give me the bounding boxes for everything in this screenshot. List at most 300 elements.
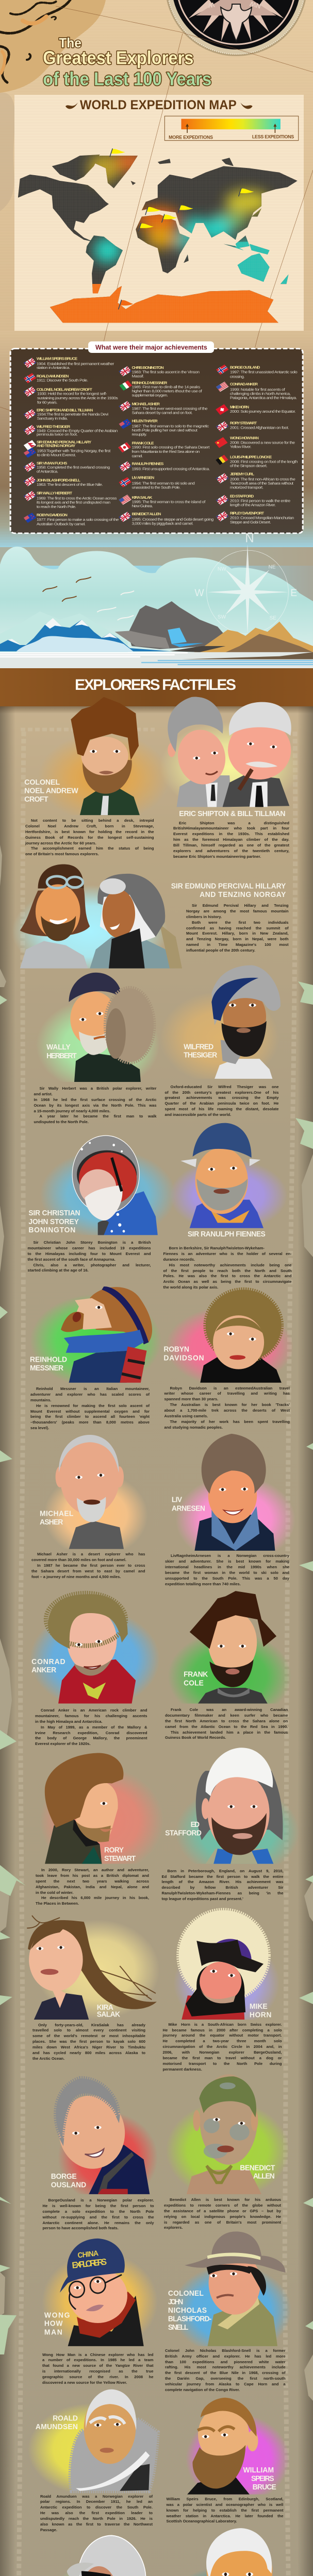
text: Allen: explorers.	[164, 2225, 183, 2230]
entry: Blashford-Snell: JOHN BLASHFORD-SNELL	[37, 478, 80, 482]
text: Fiennes: Fiennes is an adventurer who is the holder of several en-	[163, 1251, 292, 1256]
map: flags marking expeditions	[110, 148, 254, 309]
text: Amundsen: Passage.	[40, 2528, 57, 2532]
entry: Cole: FRANK COLE	[131, 441, 154, 445]
entry: Loncke: LOUIS-PHILIPPE LONCKE	[230, 455, 272, 459]
text: Fiennes: Born in Berkshire, Sir RanulphTwisleton-Wykeham-	[169, 1246, 265, 1250]
text: Horn: Mike Horn is a South-African born Swiss explorer.	[168, 2022, 282, 2027]
name: BRUCE	[253, 2483, 276, 2492]
scene: white compass: S	[243, 635, 252, 649]
name	[240, 2164, 275, 2181]
name: ANKER	[31, 1666, 57, 1674]
name	[184, 1043, 218, 1060]
entry: Arnesen	[119, 476, 195, 489]
text: Stewart	[36, 1868, 149, 1906]
text: Bruce: known for helping to establish the first permanent	[166, 2508, 284, 2513]
name	[36, 2414, 78, 2431]
text: Arnesen: unsupported to the South Pole. This was a 50 day	[165, 1576, 289, 1581]
name	[31, 1658, 65, 1674]
name	[184, 1670, 208, 1688]
text: Messner: adventurer and explorer who has scaled scores of	[30, 1392, 150, 1397]
portrait: Hillary and Norgay	[12, 865, 286, 969]
text: Arnesen: international headlines in the mid 1990s when she	[165, 1565, 289, 1569]
entry: Loncke	[216, 455, 298, 468]
entry: Amundsen	[24, 373, 88, 383]
name: ASHER	[40, 1518, 63, 1527]
entry: Fuchs: SIR VIVIAN FUCHS	[37, 461, 67, 465]
world map	[12, 147, 303, 326]
portrait: Wilfred Thesiger	[160, 965, 281, 1079]
text: Allen: the assistance of a satellite phone or GPS – but by	[164, 2209, 281, 2213]
text: Anker: Everest explorer of the 1920s.	[35, 1741, 91, 1746]
text: Fiennes: His most noteworthy achievements include being one	[169, 1263, 292, 1267]
text: Asher: In 1987 he became the first person ever to cross	[37, 1563, 145, 1568]
text: Arnesen: became the first woman in the world to ski solo and	[165, 1570, 289, 1575]
text: Bruce: weather station in Antarctica. He later founded the	[166, 2514, 284, 2518]
entry: Loncke: of the Simpson desert.	[230, 464, 268, 468]
text: Herbert: Sir Wally Herbert was a British polar explorer, writer	[39, 1086, 157, 1091]
entry: Salak: KIRA SALAK	[131, 496, 153, 500]
portrait: Kira Salak	[27, 1916, 160, 2020]
entry: Hillary and Norgay	[24, 440, 111, 458]
name	[172, 1496, 205, 1513]
legend: expedition density: LESS EXPEDITIONS	[252, 134, 294, 140]
text: Croft	[25, 818, 154, 856]
text: Blashford-Snell: British Army officer and explorer. He has led more	[165, 2354, 286, 2359]
text: Bonington: mountaineer whose career has included 19 expeditions	[28, 1246, 151, 1250]
text: Croft: Colonel Noel Andrew Croft, born in Stevenage,	[25, 824, 154, 828]
name: DAVIDSON	[163, 1354, 204, 1363]
portrait: Rory Stewart	[40, 1753, 163, 1864]
name: COLONEL	[168, 2290, 204, 2298]
text: Wong: geographic source of the river. In 2008 he	[42, 2375, 154, 2379]
entry: Davidson: ROBYN DAVIDSON	[37, 513, 68, 517]
name: CROFT	[24, 795, 48, 804]
entry: Allen	[119, 512, 213, 526]
entry: Messner: supplemental oxygen.	[131, 393, 168, 397]
text: Blashford-Snell: the Darién Gap, overseeing the first north-south	[165, 2376, 286, 2381]
entry: Fiennes: RANULPH FIENNES	[131, 462, 163, 466]
portrait: Wong How Man: CHINA	[77, 2249, 99, 2260]
text: Herbert: and artist.	[34, 1092, 53, 1096]
text: Cole: the first North American to cross the Sahara alone on	[165, 1719, 288, 1723]
portrait: Liv Arnesen	[172, 1434, 295, 1551]
text: Amundsen: Roald Amundsen was a Norwegian explorer of	[40, 2494, 153, 2499]
text: Salak: the Arctic Ocean.	[32, 2056, 64, 2061]
entry: Herbert	[24, 491, 117, 509]
entry: Fiennes	[119, 461, 210, 471]
text: Shipton and Tillman: Bill Tillman, himself regarded as one of the greatest	[173, 843, 289, 848]
portrait: Ed Stafford	[165, 1748, 300, 1864]
text: Bruce: was a polar scientist and oceanographer who is well	[166, 2502, 284, 2507]
entry: Bonington: CHRIS BONINGTON	[131, 366, 164, 370]
entry: Salak: 1995: The first woman to cross the island of	[131, 500, 206, 504]
entry: Asher: Sahara desert by camel and on foot.	[131, 411, 193, 415]
name: COLONEL	[24, 778, 60, 787]
text: Bonington: started climbing at the age of 16.	[28, 1268, 89, 1273]
text: Wong	[42, 2352, 154, 2385]
entry: Horn: MIKE HORN	[230, 405, 249, 409]
entry: Herbert: 1969: The first to cross the Arctic Ocean across	[37, 496, 117, 500]
name	[165, 1821, 202, 1838]
entry: Hillary and Norgay: SIR EDMUND PERCIVAL HILLARY	[37, 440, 91, 444]
text: Horn: He completed a two-year three month solo	[163, 2039, 282, 2043]
text: Salak: some of the world's remotest or most inhospitable	[32, 2033, 145, 2038]
entry: Asher: 1987: The first ever west-east crossing of the	[131, 406, 208, 411]
portrait: Roald Amundsen	[28, 2389, 158, 2491]
text: Messner: He is renowned for making the first solo ascent of	[36, 1403, 150, 1408]
name: WILFRED	[184, 1043, 213, 1051]
text: Horn: journey around the equator without motor transport.	[163, 2033, 282, 2038]
text: Salak: Only forty-years-old, KiraSalak has already	[38, 2023, 145, 2027]
title: of the Last 100 Years	[43, 69, 211, 90]
text: Horn: 2006, with Norwegian explorer BørgeOusland,	[163, 2050, 282, 2055]
name: FRANK	[184, 1670, 208, 1679]
text: Stafford: RanulphTwisleton-Wykeham-Fiennes as being 'in the	[162, 1891, 284, 1895]
text: Cole: Frank Cole was an award-winning Canadian	[171, 1707, 288, 1712]
entry: Amundsen: 1911: Discover the South Pole.	[37, 378, 88, 382]
entry: Thesiger	[24, 425, 118, 436]
text: Blashford-Snell: complete navigation of the Congo River.	[165, 2387, 240, 2392]
text: Cole: documentary filmmaker and keen surfer who became	[165, 1713, 288, 1718]
text: Hillary and Norgay: climbers in history.	[186, 914, 222, 919]
portrait: Wong How Man: EXPLORERS	[72, 2257, 107, 2270]
portrait: Borge Ousland	[51, 2078, 158, 2194]
name	[97, 2004, 121, 2019]
entry: Bruce: station in Antarctica.	[37, 366, 70, 370]
heading: AND TENZING NORGAY	[200, 891, 286, 899]
entry: Fuchs: 1958: Completed the first overland crossing	[37, 465, 110, 469]
text: Hillary and Norgay: Sir Edmund Percival Hillary and Tenzing	[192, 903, 289, 908]
text: Asher	[31, 1552, 145, 1579]
portraits group one	[24, 697, 300, 818]
text: Blashford-Snell: Colonel John Nicholas Blashford-Snell is a former	[165, 2348, 286, 2353]
text: Anker: the body of George Mallory, the preeminent	[35, 1736, 147, 1740]
text: Hillary and Norgay: and Tenzing Norgay, born in Nepal, were both	[186, 937, 289, 941]
text: Fiennes: Arctic Ocean as well as being the first to circumnavigate	[163, 1279, 292, 1284]
text: Stewart: spent the next two years walking across	[36, 1879, 149, 1884]
entry: Thayer: HELEN THAYER	[131, 419, 158, 423]
text: Hillary and Norgay: named in Time Magazine's 100 most	[186, 942, 289, 947]
name: COLE	[184, 1679, 204, 1688]
name: WALLY	[46, 1043, 71, 1052]
illustration: sky, mountains and compass scene	[0, 531, 313, 668]
entry: Wong: WONG HOW MAN	[230, 436, 259, 440]
scene: white compass	[194, 531, 297, 649]
text: Wong: that found a new source of the Yangtze River that	[42, 2363, 154, 2368]
name: MESSNER	[30, 1364, 64, 1372]
text: Stafford: length of the Amazon River. His achievement was	[162, 1879, 284, 1884]
illustration: compass	[165, 0, 307, 56]
text: Bonington: Sir Christian John Storey Bonington is a British	[33, 1240, 151, 1245]
entry: Wong: Yellow River.	[230, 445, 252, 449]
entry: Bonington: 1983: The first solo ascent in the Vinson	[131, 370, 200, 374]
name: MIKE	[250, 2003, 268, 2011]
entry: Bruce: 1904: Established the first permanent weather	[37, 362, 114, 366]
heading band: explorers factfiles: EXPLORERS FACTFILES	[75, 676, 236, 693]
text: Davidson: Robyn Davidson is an esteemedAustralian travel	[170, 1386, 290, 1391]
name: ROBYN	[163, 1345, 189, 1354]
text: Thesiger	[165, 1084, 278, 1117]
portrait: Michael Asher	[40, 1435, 147, 1549]
text: Blashford-Snell: than 100 expeditions and pioneered white water	[165, 2360, 286, 2364]
text: Thesiger: and inaccessible parts of the world.	[165, 1112, 231, 1117]
entry: Shipton and Tillman: 1934:The first to penetrate the Nanda Devi	[37, 412, 108, 416]
text: Davidson	[164, 1386, 290, 1430]
name: SALAK	[97, 2010, 121, 2019]
name	[243, 2466, 276, 2492]
scene: white compass: E	[290, 587, 297, 599]
text: Horn	[162, 2022, 282, 2072]
text: Allen: Benedict Allen is best known for his arduous	[170, 2197, 281, 2202]
text: Cole	[165, 1707, 288, 1740]
text: Asher: Michael Asher is a desert explorer who has	[37, 1552, 145, 1556]
entry: Stafford: ED STAFFORD	[230, 494, 254, 498]
scene: white compass: W	[194, 587, 204, 599]
name: ROALD	[53, 2414, 78, 2423]
text: Davidson: about a 1,700-mile trek across the deserts of West	[164, 1408, 290, 1413]
name: WONG	[44, 2311, 70, 2319]
text: Hillary and Norgay: Mount Everest. Hillary, born in New Zealand,	[186, 931, 289, 936]
entry: Amundsen: ROALD AMUNDSEN	[37, 374, 69, 379]
scene: blue snowy mountains	[0, 618, 172, 652]
text: Anker	[35, 1708, 147, 1746]
entry: Anker	[216, 382, 297, 400]
name: SNELL	[168, 2324, 189, 2332]
text: Allen: expeditions to remote corners of the globe without	[164, 2203, 281, 2208]
name	[30, 1355, 67, 1372]
entry: Bonington	[119, 366, 200, 379]
heading tab	[88, 342, 214, 353]
text: Bonington: the first ascent of the south face of Annapurna.	[28, 1257, 116, 1262]
name	[40, 1510, 74, 1527]
text: Wong: discovered a new source for the Yellow River.	[42, 2380, 127, 2385]
entry: Blashford-Snell: 1963: The first descent of the Blue Nile.	[37, 483, 103, 487]
entry: Cole: from Mauritania to the Red Sea alone on	[131, 450, 200, 454]
entry: Wong: 2008: Discovered a new source for the	[230, 440, 295, 445]
illustration: compass: W	[207, 1, 215, 10]
text: Messner: Mount Everest without supplemental oxygen and for	[30, 1409, 150, 1414]
illustration: compass: NW	[249, 0, 262, 10]
text: Stafford: top league of expeditions past and present.'	[162, 1896, 243, 1901]
entry: Ousland	[216, 364, 298, 379]
text: Bonington	[28, 1240, 151, 1273]
text: Stewart: In 2000, Rory Stewart, an author and adventurer,	[41, 1868, 149, 1872]
portrait: Blashford-Snell	[168, 2231, 291, 2346]
text: Davidson: Australia using camels.	[164, 1414, 208, 1418]
portrait: Mike Horn	[174, 1910, 279, 2020]
text: Thesiger: Oxford-educated Sir Wilfred Thesiger was one	[170, 1084, 278, 1089]
text: Stewart: took leave from his post as a British diplomat and	[36, 1873, 149, 1878]
entry: Hillary and Norgay: to climb Mount Everest.	[37, 453, 76, 457]
text: Davidson: spanned more than 30 years.	[164, 1397, 218, 1401]
name	[46, 1043, 77, 1060]
text: Herbert	[34, 1086, 157, 1124]
text: Salak: miles down West Africa's Niger River to Timbuktu	[32, 2045, 145, 2049]
text: Amundsen: also known as the first to traverse the Northwest	[40, 2522, 153, 2527]
name	[51, 2173, 86, 2189]
heading: SIR EDMUND PERCIVAL HILLARY	[171, 882, 286, 891]
text: Ousland: complete a solo expedition to the North Pole	[42, 2209, 154, 2214]
name: RORY	[104, 1846, 124, 1855]
entry: Salak: New Guinea.	[131, 504, 153, 508]
entry: Croft: 1930: Held the record for the longest self-	[37, 392, 107, 396]
illustration: old map coastline top-left	[0, 0, 70, 82]
entry: Asher	[119, 401, 208, 415]
text: Fiennes: of the first people to reach both the North and South	[163, 1268, 292, 1273]
entry: Shipton and Tillman	[24, 408, 108, 420]
text: Shipton and Tillman: him as the foremost Himalayan climber of the day.	[173, 837, 289, 842]
title	[43, 36, 211, 90]
name: REINHOLD	[30, 1355, 67, 1364]
entry: Anker: CONRAD ANKER	[230, 382, 258, 386]
text: Hillary and Norgay	[186, 903, 289, 953]
map: continents with heat colours	[12, 147, 303, 326]
heading: world expedition map: WORLD EXPEDITION MAP	[80, 98, 237, 112]
entry: Stafford	[216, 494, 291, 507]
scene: white compass: N	[245, 531, 254, 545]
scene: shoreline stripes	[0, 652, 313, 668]
text: Croft: journey across the Arctic for 60 years.	[25, 841, 96, 845]
panel: major achievements	[10, 342, 303, 533]
portrait: Ranulph Fiennes	[170, 1123, 287, 1228]
entry: Croft: COLONEL NOEL ANDREW CROFT	[37, 387, 92, 392]
text: Bruce	[166, 2497, 284, 2523]
text: Asher: covered more than 30,000 miles on foot and camel.	[31, 1557, 126, 1562]
text: Asher: foot – a journey of nine months and 4,500 miles.	[31, 1574, 121, 1579]
entry: Blashford-Snell	[24, 476, 103, 487]
text: Horn: circumnavigation of the Arctic Circle in 2004 and, in	[163, 2044, 282, 2049]
text: Arnesen: LivRagnheimArnesen is a Norwegian cross-country	[171, 1553, 289, 1558]
entry: Arnesen: 1994: The first woman to ski solo and	[131, 481, 195, 485]
entry: Horn: 2000: Solo journey around the Equator.	[230, 410, 296, 414]
text: Blashford-Snell: rafting. His most noteworthy achievements include	[165, 2365, 286, 2369]
text: Herbert: a 15-month journey of nearly 4,000 miles.	[34, 1109, 110, 1113]
entry: Bonington: Massif.	[131, 374, 144, 379]
name: STAFFORD	[165, 1829, 202, 1838]
scene: white compass: SW	[218, 615, 226, 620]
text: Horn: He became famous in 2000 after completing a solo	[163, 2028, 282, 2032]
scene: white compass: SE	[270, 615, 276, 621]
text: Herbert: A year later he became the first man to walk	[39, 1114, 157, 1118]
text: Ousland: without re-supplying and the first to cross the	[42, 2215, 154, 2219]
entry: Asher: MICHAEL ASHER	[131, 402, 160, 406]
entry: Horn	[216, 404, 296, 415]
text: Cole: camel from the Atlantic Ocean to the Red Sea in 1990.	[165, 1724, 288, 1729]
text: Amundsen	[40, 2494, 153, 2532]
portrait: Reinhold Messner	[30, 1286, 162, 1383]
entry: Messner: higher than 8,000 meters ithout the use of	[131, 389, 203, 393]
text: Croft: Not content to be sitting behind a desk, intrepid	[31, 818, 154, 823]
text: Blashford-Snell	[165, 2348, 286, 2392]
text: Thesiger: greatest achievements was crossing the Empty	[165, 1095, 278, 1100]
name: BORGE	[51, 2173, 77, 2181]
entry: Stafford: length of the Amazon River.	[230, 503, 276, 507]
text: Messner	[30, 1386, 150, 1430]
name: MICHAEL	[40, 1510, 74, 1518]
entry: Stewart: 2001: Crossed Afghanistan on foot.	[230, 426, 289, 430]
entry: Thayer	[119, 419, 209, 436]
entry: Anker: challenging climbs in North America,	[230, 392, 291, 396]
entry: Allen: 3,000 miles by piggyback and camel.	[131, 521, 193, 526]
text: Messner: sea level).	[30, 1426, 49, 1430]
portrait: Benedict Allen	[166, 2074, 289, 2194]
text: Davidson: The majority of her work has been spent travelling	[170, 1419, 290, 1424]
name: ARNESEN	[172, 1504, 205, 1513]
name: STEWART	[104, 1855, 136, 1863]
name: Christian Bonington: SIR CHRISTIAN	[28, 1209, 80, 1217]
text: Thesiger: of the 20th century's greatest explorers.One of his	[165, 1090, 278, 1095]
entry: Arnesen: LIV ARNESEN	[131, 476, 154, 480]
portrait: Wally Herbert	[36, 973, 160, 1082]
entry: Hillary and Norgay: AND TENZING NORGAY	[37, 444, 75, 448]
text: Hillary and Norgay: Norgay are among the most famous mountain	[186, 909, 289, 913]
text: Horn: permanent darkness.	[163, 2067, 202, 2072]
text: Ousland: Antarctic continent alone. He remains the only	[42, 2221, 154, 2225]
scene: golden mountains	[170, 622, 313, 659]
text: Shipton and Tillman: Eric Shipton was a distinguished	[179, 820, 289, 825]
text: Cole: Guiness Book of World Records.	[165, 1735, 226, 1740]
text: Amundsen: polar regions. In December 1911, he led an	[40, 2499, 153, 2504]
entry: Curl: motorized transport.	[230, 485, 263, 489]
text: Shipton and Tillman: became Eric Shipton's mountaineering partner.	[173, 854, 261, 859]
text: Davidson: and studying nomadic peoples.	[164, 1425, 223, 1430]
entry: Thesiger: WILFRED THESIGER	[37, 425, 71, 429]
text: Stewart: He described his 6,000 mile journey in his book,	[41, 1895, 149, 1900]
heading band: explorers factfiles	[0, 668, 313, 706]
text: Shipton and Tillman: Everest expeditions in the 1930s. This established	[173, 832, 289, 836]
portrait: Conrad Anker	[30, 1593, 160, 1704]
text: Stafford: Ed Stafford became the first person to walk the entire	[162, 1874, 284, 1879]
text: Fiennes: durance records.	[163, 1257, 195, 1262]
text: Allen: relying on local indigenous people's knowledge. He	[164, 2214, 281, 2219]
text: Ousland	[42, 2198, 154, 2230]
scene: white compass: NW	[218, 567, 226, 572]
name: JOHN	[168, 2298, 183, 2306]
name: Ranulph Fiennes: SIR RANULPH FIENNES	[188, 1230, 266, 1239]
entry: Curl: Tanezrouft area of the Sahara without	[230, 481, 294, 485]
text: Ousland: person to have accomplished both feats.	[42, 2226, 119, 2230]
name: KIRA	[97, 2004, 113, 2012]
name	[24, 778, 78, 804]
entry: Curl	[216, 472, 296, 489]
text: Anker: in the high Himalaya and Antarctica.	[35, 1719, 103, 1724]
text: Stewart: The Places in Between.	[36, 1901, 79, 1906]
text: Hillary and Norgay: influential people of the 20th century.	[186, 948, 255, 953]
entry: Bruce	[24, 357, 114, 370]
text: Arnesen: skier and adventurer. She is best known for making	[165, 1559, 289, 1564]
text: Stewart: Afghanistan, Pakistan, India and Nepal, alone and	[36, 1885, 149, 1889]
text: Anker: Conrad Anker is an American rock climber and	[41, 1708, 147, 1713]
entry: Davenport: 2010: Crossed Mongolian-Manchurian	[230, 516, 294, 520]
entry: Curl: 2008: The first non-African to cross the	[230, 477, 296, 481]
text: Croft: Guiness Book of Records for the longest self-sustaining	[25, 835, 154, 840]
text: Asher: the Sahara desert from west to east by camel and	[31, 1569, 145, 1573]
text: Amundsen: He was also the first expedition leader to	[40, 2511, 153, 2515]
entry: Stafford: 2010: First person to walk the entire	[230, 499, 291, 503]
entry: Davenport: Steppe and Gobi Desert.	[230, 520, 271, 524]
portrait: Wong How Man	[42, 2239, 158, 2346]
text: Wong: a number of expeditions. In 1985 he led a team	[42, 2358, 154, 2362]
entry: Herbert: its longest axis and the first undisputed man	[37, 500, 110, 504]
legend: expedition density: MORE EXPEDITIONS	[169, 134, 213, 140]
entry: Arnesen: unassisted to the South Pole.	[131, 485, 180, 489]
name: AMUNDSEN	[36, 2423, 78, 2431]
entry: Ousland: BORGE OUSLAND	[230, 365, 260, 370]
name: ALLEN	[253, 2172, 275, 2181]
entry: Cole: 1990: First solo crossing of the Sahara Desert	[131, 445, 210, 449]
portrait: Vivian Fuchs	[166, 2528, 289, 2576]
